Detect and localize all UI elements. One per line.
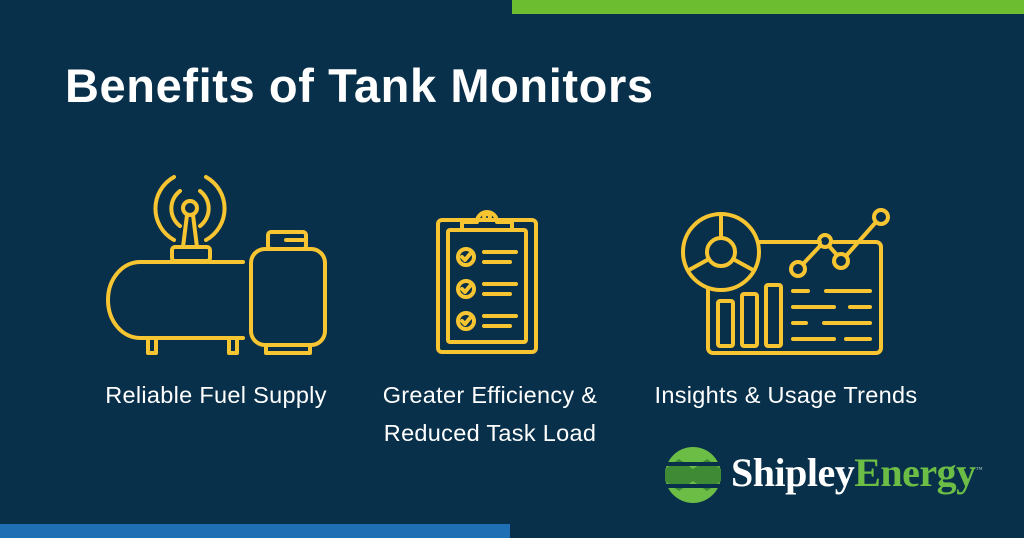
logo text: ShipleyEnergy™	[731, 450, 982, 495]
logo icon	[665, 447, 721, 503]
title: Benefits of Tank Monitors	[65, 59, 654, 112]
icon: clipboard	[438, 212, 536, 352]
label: efficiency: Reduced Task Load	[384, 420, 596, 446]
icon: tank with antenna	[108, 177, 325, 353]
label: efficiency	[383, 382, 597, 446]
label: efficiency: Greater Efficiency &	[383, 382, 597, 408]
label: reliable fuel supply: Reliable Fuel Supply	[105, 382, 327, 408]
green accent bar	[512, 0, 1024, 14]
label: insights: Insights & Usage Trends	[655, 382, 917, 408]
blue accent bar	[0, 524, 510, 538]
logo	[665, 447, 982, 503]
icon: analytics dashboard	[683, 210, 888, 353]
